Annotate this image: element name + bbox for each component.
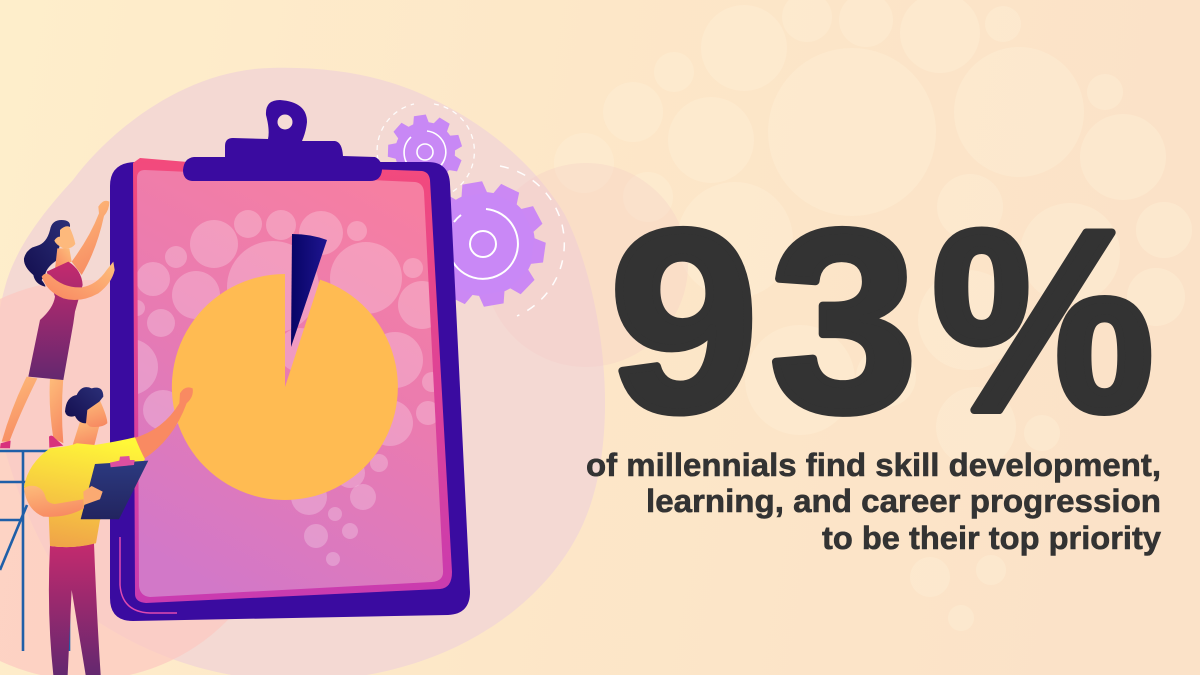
man held clipboard	[81, 461, 148, 519]
woman neck	[55, 248, 72, 269]
woman front arm	[42, 262, 115, 300]
background blob: large	[0, 68, 605, 675]
woman hair	[24, 220, 70, 287]
digit 9: 9	[610, 176, 758, 465]
clipboard paper	[137, 170, 443, 597]
clipboard frame	[133, 158, 452, 603]
man trousers	[49, 543, 101, 675]
percent sign: %	[932, 176, 1154, 465]
pie chart	[172, 274, 398, 500]
man shirt	[24, 437, 145, 547]
man hair	[65, 387, 103, 423]
man raised arm	[133, 387, 193, 459]
background blob: lower left	[0, 280, 285, 675]
man hand	[83, 486, 103, 505]
paper bubbles	[138, 210, 436, 566]
man face	[83, 401, 107, 427]
caption	[586, 447, 1161, 556]
big number: 93%	[610, 176, 1154, 465]
clipboard	[102, 100, 470, 621]
clipboard clip	[183, 100, 382, 181]
woman shoes	[0, 436, 63, 448]
background bubbles	[554, 0, 1192, 631]
caption line 1: of millennials find skill development,	[586, 447, 1161, 483]
scaffold	[0, 451, 69, 651]
icon: small gear	[377, 104, 474, 192]
man neck	[73, 422, 100, 447]
pie wedge	[291, 234, 327, 347]
clip hole	[278, 114, 292, 130]
woman far leg	[50, 378, 63, 443]
caption line 2: learning, and career progression	[646, 483, 1161, 519]
background blob: behind gears	[484, 163, 688, 367]
board highlight	[120, 537, 177, 613]
woman	[0, 201, 115, 448]
man	[24, 387, 193, 675]
digit 3: 3	[770, 176, 917, 465]
clipboard board	[110, 162, 470, 621]
caption line 3: to be their top priority	[822, 520, 1161, 556]
man held clipboard clip	[110, 456, 135, 467]
woman raised arm	[72, 201, 109, 275]
icon: large gear	[420, 166, 564, 316]
woman dress	[28, 262, 83, 380]
man arm	[24, 486, 84, 517]
woman face	[54, 226, 75, 248]
woman near leg	[2, 377, 37, 442]
